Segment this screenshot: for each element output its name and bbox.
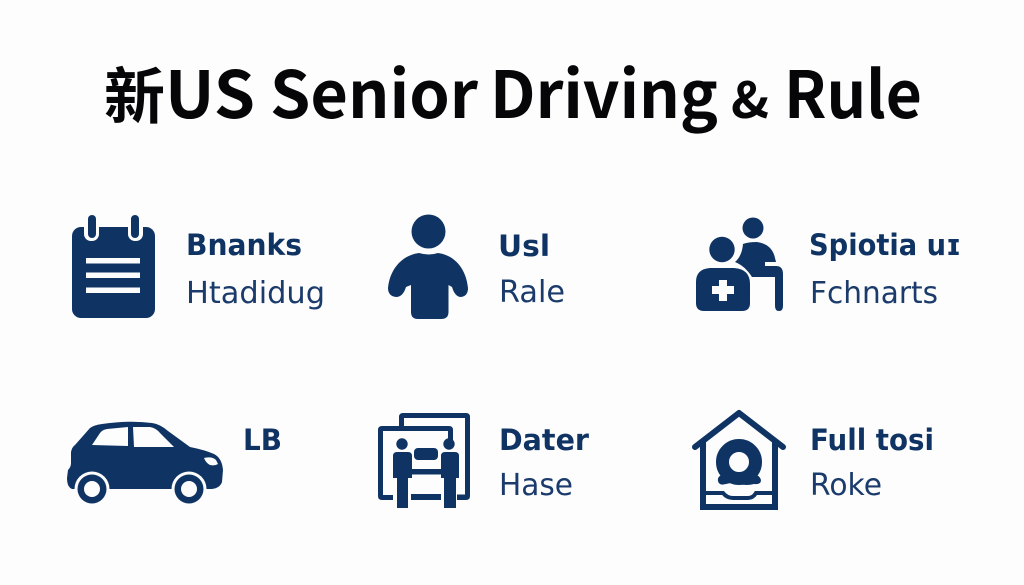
label: Fchnarts: Fchnarts <box>810 276 938 311</box>
item: Usl <box>388 214 565 319</box>
item: Bnanks <box>72 212 325 318</box>
label: Hase: Hase <box>499 468 573 503</box>
heading: Spiotia ur: Spiotia uɪ <box>809 228 961 262</box>
title: Senior <box>270 43 479 137</box>
title: & <box>731 61 769 133</box>
heading: Bnanks: Bnanks <box>186 228 302 262</box>
icon: clipboard <box>72 212 155 318</box>
heading: LB: LB <box>243 423 282 457</box>
heading: Full tosi: Full tosi <box>810 423 934 457</box>
item: Full tosi <box>695 413 934 507</box>
icon: two people in a frame <box>378 413 470 508</box>
title: US <box>165 43 255 137</box>
title: 新 <box>104 47 165 136</box>
title: Driving <box>490 43 718 137</box>
icon: car <box>67 422 223 506</box>
label: Htadidug: Htadidug <box>186 276 325 311</box>
item: LB <box>67 422 282 506</box>
icon: person <box>388 214 468 319</box>
item: Spiotia ur <box>696 218 961 311</box>
title: Rule <box>784 43 922 137</box>
heading: Dater: Dater <box>499 423 590 457</box>
heading: Usl: Usl <box>498 229 550 263</box>
icon: caregiver with medical patient <box>696 218 783 311</box>
icon: house with ring <box>695 413 783 507</box>
title <box>104 43 922 137</box>
item: Dater <box>378 413 590 508</box>
label: Rale: Rale <box>499 275 565 310</box>
label: Roke: Roke <box>810 468 882 503</box>
